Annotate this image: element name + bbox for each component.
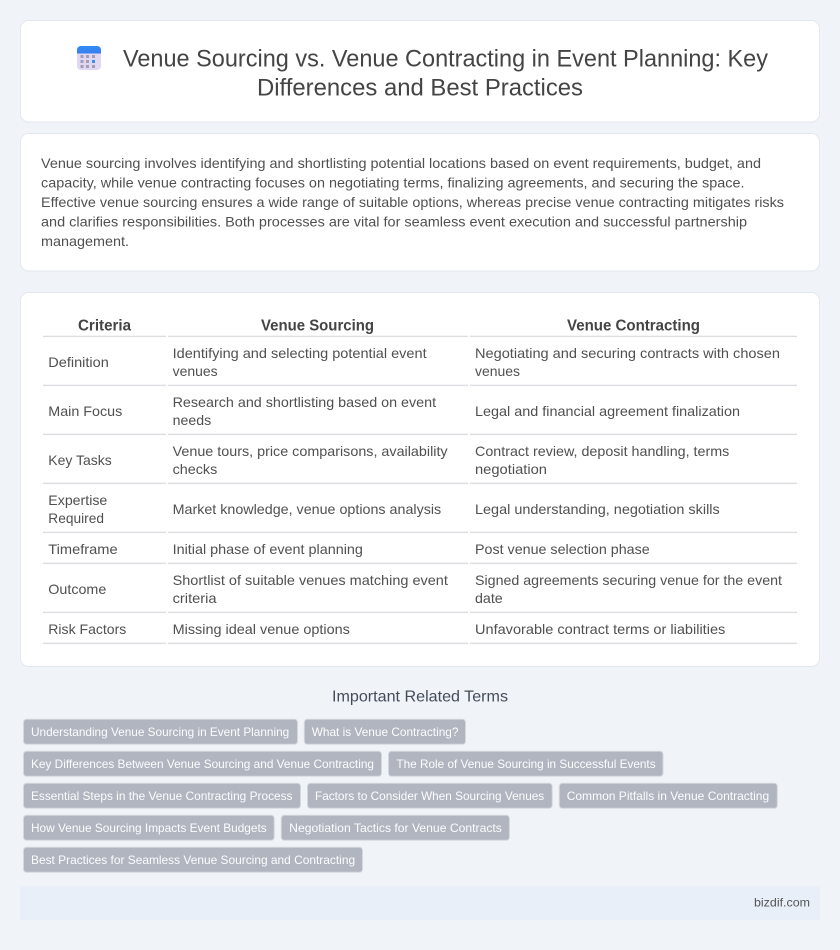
row: expertise required: Legal understanding, negotiation skills [475,501,720,517]
panel: title card [20,20,820,122]
panel: comparison table [20,292,820,666]
tag: event budgets: How Venue Sourcing Impacts Event Budgets [31,821,267,835]
row: risk factors [43,621,797,644]
row: main focus: Legal and financial agreement finalization [475,403,740,419]
tag: factors to consider [308,783,552,808]
row: definition: venues [475,363,520,379]
row: definition: Identifying and selecting potential event [173,345,427,361]
row: key tasks: negotiation [475,461,547,477]
row: definition: venues [173,363,218,379]
row: outcome: Signed agreements securing venue for the event [475,572,782,588]
summary text block: Effective venue sourcing ensures a wide range of suitable options, whereas precise venue contracting mitigates risks [41,194,784,210]
row: main focus [43,394,797,435]
summary text block: management. [41,233,129,249]
tag: role of venue sourcing: The Role of Venue Sourcing in Successful Events [396,757,656,771]
tag: common pitfalls: Common Pitfalls in Venue Contracting [567,789,769,803]
title [123,46,768,102]
title: Differences and Best Practices [257,75,583,102]
row: definition [43,345,797,386]
row: timeframe: Timeframe [48,541,118,557]
tag: best practices: Best Practices for Seamless Venue Sourcing and Contracting [31,853,355,867]
row: timeframe [43,541,797,564]
summary text block: Venue sourcing involves identifying and shortlisting potential locations based on event requirements, budget, and [41,155,761,171]
tag: essential steps [24,783,300,808]
row: key tasks: checks [173,461,217,477]
tag: essential steps: Essential Steps in the Venue Contracting Process [31,789,292,803]
row: timeframe: Post venue selection phase [475,541,650,557]
row: main focus: Main Focus [48,403,122,419]
table header: Venue Contracting [567,318,700,335]
row: main focus: Research and shortlisting based on event [173,394,436,410]
title: Venue Sourcing vs. Venue Contracting in Event Planning: Key [123,46,768,73]
icon: calendar [77,46,101,70]
row: expertise required [43,492,797,533]
footer bar: bizdif.com [754,896,810,910]
related terms tags [24,719,777,872]
row: outcome [43,572,797,613]
row: key tasks: Key Tasks [48,452,112,468]
tag: negotiation tactics: Negotiation Tactics for Venue Contracts [289,821,502,835]
table header: Criteria [78,318,131,335]
heading: important related terms: Important Related Terms [332,689,508,706]
row: outcome: date [475,590,503,606]
table header: Venue Sourcing [261,318,374,335]
row: risk factors: Missing ideal venue options [173,621,350,637]
row: risk factors: Risk Factors [48,621,126,637]
row: key tasks: Venue tours, price comparisons, availability [173,443,448,459]
tag: role of venue sourcing [388,751,663,776]
tag: understanding venue sourcing: Understanding Venue Sourcing in Event Planning [31,725,289,739]
row: outcome: criteria [173,590,217,606]
tag: event budgets [24,815,274,840]
tag: what is venue contracting: What is Venue Contracting? [312,725,459,739]
tag: best practices [24,847,362,872]
row: key tasks [43,443,797,484]
row: key tasks: Contract review, deposit handling, terms [475,443,729,459]
table header [43,318,797,337]
tag: key differences [24,751,382,776]
row: definition: Definition [48,354,109,370]
summary text block: and clarifies responsibilities. Both processes are vital for seamless event execution and successful partnership [41,214,747,230]
tag: factors to consider: Factors to Consider When Sourcing Venues [315,789,544,803]
row: definition: Negotiating and securing contracts with chosen [475,345,780,361]
summary text block [41,155,784,249]
tag: negotiation tactics [281,815,509,840]
tag: understanding venue sourcing [24,719,298,744]
summary text block: capacity, while venue contracting focuses on negotiating terms, finalizing agreements, and securing the space. [41,174,744,190]
row: outcome: Outcome [48,581,107,597]
footer bar [20,886,820,920]
tag: common pitfalls [559,783,777,808]
tag: what is venue contracting [304,719,466,744]
row: risk factors: Unfavorable contract terms or liabilities [475,621,725,637]
tag: key differences: Key Differences Between Venue Sourcing and Venue Contracting [31,757,374,771]
row: expertise required: Market knowledge, venue options analysis [173,501,441,517]
panel: summary [20,134,820,271]
row: expertise required: Expertise [48,492,108,508]
row: timeframe: Initial phase of event planning [173,541,363,557]
row: main focus: needs [173,412,211,428]
row: outcome: Shortlist of suitable venues matching event [173,572,448,588]
row: expertise required: Required [48,510,104,526]
